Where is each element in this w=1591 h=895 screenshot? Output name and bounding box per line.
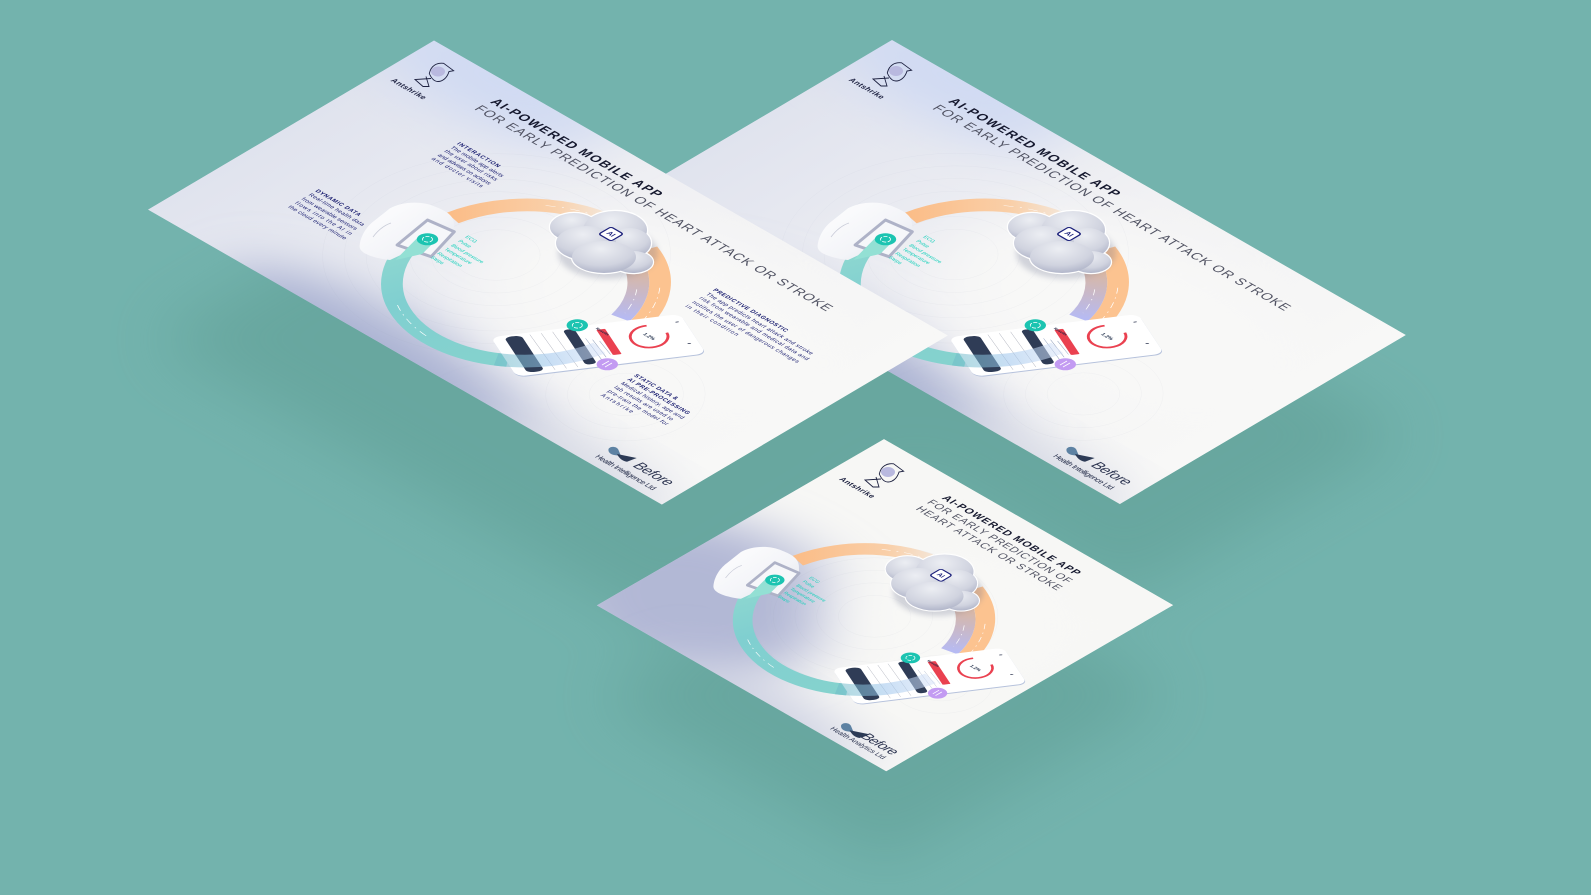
cloud: AI	[604, 230, 617, 238]
badge: purple	[597, 358, 618, 370]
poster 3 texts	[616, 455, 1147, 761]
poster 3 texts: Health Analytics Ltd	[828, 726, 888, 760]
badge: purple	[928, 688, 947, 699]
poster 2 texts	[624, 56, 1378, 493]
teal data labels: Respiration	[893, 252, 922, 268]
poster 3 texts: HEART ATTACK OR STROKE	[913, 505, 1065, 592]
badge: teal	[1025, 319, 1046, 331]
poster 2 texts: Health Intelligence Ltd	[1051, 453, 1117, 491]
poster 3 texts: FOR EARLY PREDICTION OF	[924, 498, 1075, 585]
poster 1 texts: Antshrike	[388, 77, 430, 101]
callout: static data	[599, 374, 699, 432]
callout: predictive diagnostic: in their condition	[683, 305, 740, 337]
teal data labels: Steps	[775, 595, 792, 604]
poster 3 paper	[597, 439, 1174, 772]
poster 1 texts: FOR EARLY PREDICTION OF HEART ATTACK OR STROKE	[471, 103, 837, 313]
poster 3 logo: Before mark	[841, 723, 869, 738]
ring	[796, 173, 1172, 393]
poster 3 diagram	[694, 520, 1034, 719]
callout: dynamic data: Real-time health data	[306, 193, 366, 227]
poster 2 texts: Antshrike	[846, 77, 888, 101]
poster 3 texts: Before	[857, 731, 903, 757]
phone: 1.2%	[641, 332, 657, 342]
phone: 1.2%	[1099, 332, 1115, 342]
poster 1 texts	[166, 57, 920, 494]
teal data labels: Blood pressure	[907, 244, 943, 264]
poster 1 texts: Before	[629, 460, 678, 488]
phone: Results	[926, 660, 940, 668]
phone: Results	[595, 327, 610, 336]
teal data labels: Temperature	[788, 587, 817, 604]
watch	[360, 203, 454, 260]
callout: interaction: and advises on actions	[435, 153, 492, 186]
drop shadows	[154, 140, 1406, 862]
callout: predictive diagnostic	[683, 288, 824, 370]
poster 3 texts: AI-POWERED MOBILE APP	[939, 494, 1083, 577]
phone	[949, 307, 1165, 378]
phone	[832, 641, 1027, 705]
ring	[694, 520, 1034, 719]
poster 1 diagram	[338, 173, 714, 393]
poster 1: front landscape	[148, 40, 948, 504]
callout: predictive diagnostic: notifies the user of dangerous changes	[690, 301, 800, 364]
teal data labels: Respiration	[435, 252, 464, 268]
watch	[818, 203, 912, 260]
poster 2 logo: Antshrike	[873, 63, 912, 86]
poster 2 paper	[666, 40, 1406, 504]
poster 1 texts: Health Intelligence Ltd	[593, 453, 659, 491]
poster 3 texts: Antshrike	[837, 476, 878, 500]
teal data labels: Pulse	[456, 239, 473, 249]
cloud: AI	[1062, 230, 1075, 238]
ring	[338, 173, 714, 393]
callout: static data: STATIC DATA &	[632, 374, 680, 401]
callout: predictive diagnostic: risk from wearable and medical data and	[697, 296, 810, 361]
phone: 1.2%	[968, 664, 983, 673]
teal data labels: ECG	[921, 235, 936, 244]
callout: dynamic data	[286, 189, 375, 241]
poster 1 paper	[148, 40, 948, 504]
phone	[491, 307, 707, 378]
poster 1 logo: Antshrike	[415, 63, 454, 86]
callout: interaction: INTERACTION	[455, 142, 501, 169]
teal data labels: Steps	[886, 256, 904, 266]
poster 2: back landscape	[666, 40, 1406, 504]
teal data labels: Blood pressure	[794, 584, 828, 603]
cloud	[886, 554, 983, 616]
teal data labels	[775, 576, 840, 614]
callout: interaction: and doctor visits	[429, 157, 484, 189]
teal data labels: Respiration	[781, 591, 808, 606]
teal data labels	[886, 235, 957, 277]
poster 2 logo: Before mark	[1066, 447, 1095, 462]
callout: dynamic data: the cloud every minute	[286, 205, 348, 241]
watch	[713, 547, 799, 599]
teal data labels: Steps	[428, 256, 446, 266]
callout: predictive diagnostic: PREDICTIVE DIAGNOSTIC	[711, 288, 790, 334]
poster 1 logo: Before mark	[608, 447, 637, 462]
badge: purple	[1055, 358, 1076, 370]
callout: static data: Medical history, age and	[619, 382, 685, 420]
teal data labels	[428, 235, 499, 277]
callout: interaction: The mobile app alerts	[448, 146, 505, 178]
teal data labels: Blood pressure	[449, 244, 485, 264]
callout: dynamic data: from wearable sensors	[299, 197, 358, 231]
callout: dynamic data: DYNAMIC DATA	[313, 189, 363, 218]
callout: static data: lab results are used to	[612, 386, 675, 422]
cloud	[550, 211, 658, 279]
poster 2 texts: FOR EARLY PREDICTION OF HEART ATTACK OR STROKE	[929, 103, 1295, 313]
blue arc over phone	[496, 324, 599, 384]
callout: interaction	[429, 142, 511, 190]
teal data labels: Temperature	[442, 247, 473, 265]
teal data labels: Temperature	[900, 247, 931, 265]
badge: teal	[901, 652, 920, 663]
callout: static data: Antshrike	[599, 393, 635, 415]
phone: Results	[1053, 327, 1068, 336]
callout: static data: AI PRE-PROCESSING	[625, 378, 691, 416]
poster 2 diagram	[796, 173, 1172, 393]
teal data labels: Pulse	[800, 580, 816, 589]
poster 3: square	[597, 439, 1174, 772]
blue arc over phone	[837, 656, 930, 711]
badge: teal	[567, 319, 588, 331]
poster 2 texts: Before	[1087, 460, 1136, 488]
callout: dynamic data: flows into the AI in	[293, 201, 353, 236]
callout: static data: pre-train the model for	[605, 390, 670, 427]
cloud: AI	[935, 572, 946, 579]
teal data labels: Pulse	[914, 239, 931, 249]
cloud	[1008, 211, 1116, 279]
poster 3 logo: Antshrike	[865, 464, 904, 487]
callout: interaction: the user about risks	[442, 149, 499, 182]
poster 2 texts: AI-POWERED MOBILE APP	[945, 96, 1125, 199]
blue arc over phone	[954, 324, 1057, 384]
teal data labels: ECG	[463, 235, 478, 244]
callout: predictive diagnostic: The app predicts heart attack and stroke	[704, 292, 815, 356]
teal data labels: ECG	[807, 576, 821, 584]
poster 1 texts: AI-POWERED MOBILE APP	[487, 96, 667, 200]
